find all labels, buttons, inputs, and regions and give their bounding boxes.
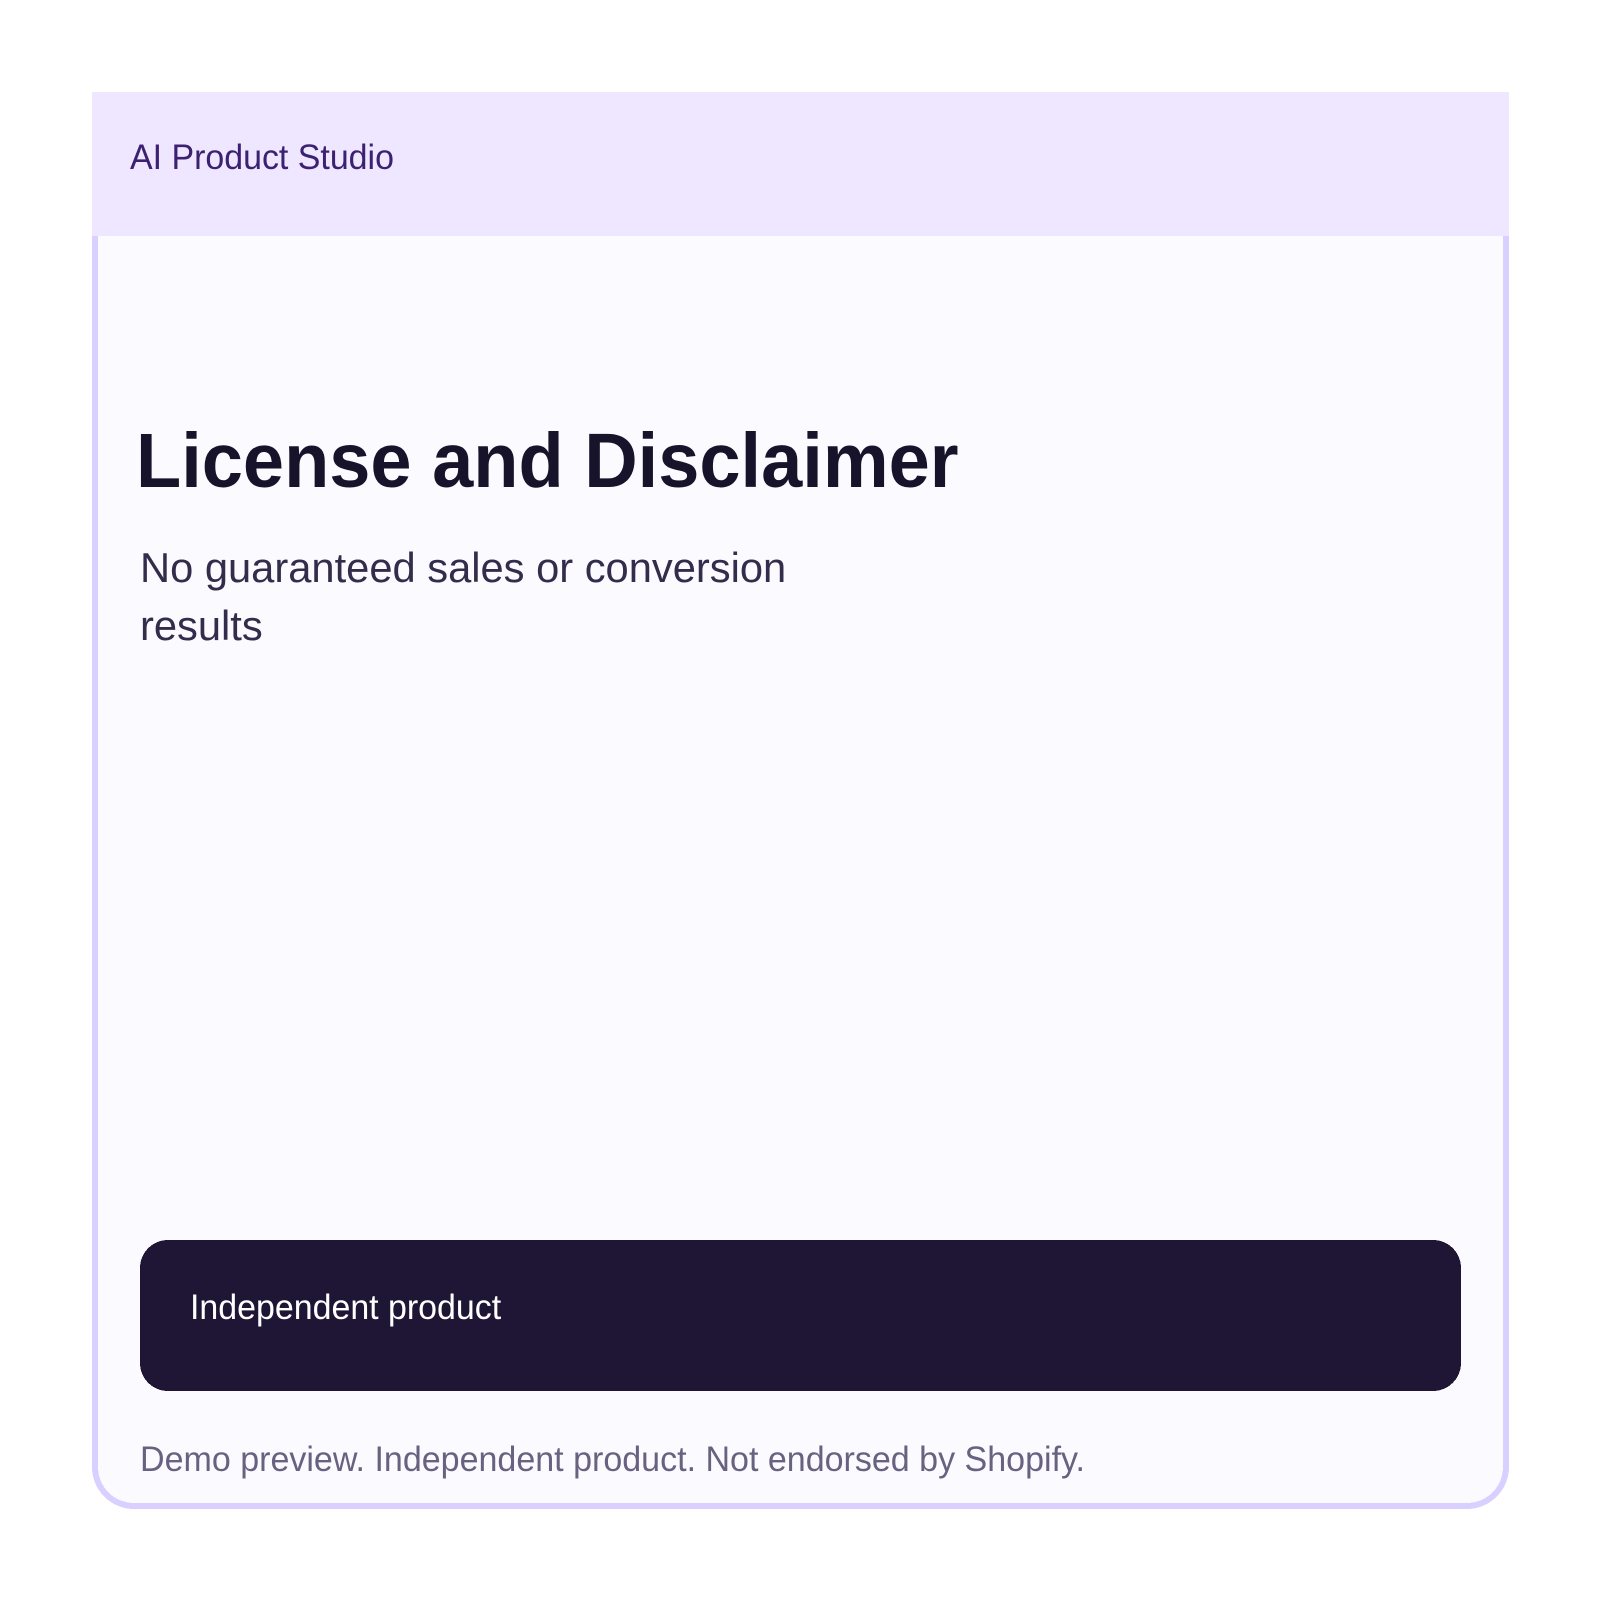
card border and fill [92,92,1509,1509]
subtitle: No guaranteed sales or conversion [140,544,786,591]
header band [92,92,1509,236]
subtitle: results [140,602,263,649]
title: License and Disclaimer [136,418,959,504]
brand label: AI Product Studio [130,138,394,177]
callout text: Independent product [190,1288,501,1327]
subtitle [140,544,786,649]
callout bar [140,1240,1461,1391]
footer note: Demo preview. Independent product. Not endorsed by Shopify. [140,1440,1085,1479]
